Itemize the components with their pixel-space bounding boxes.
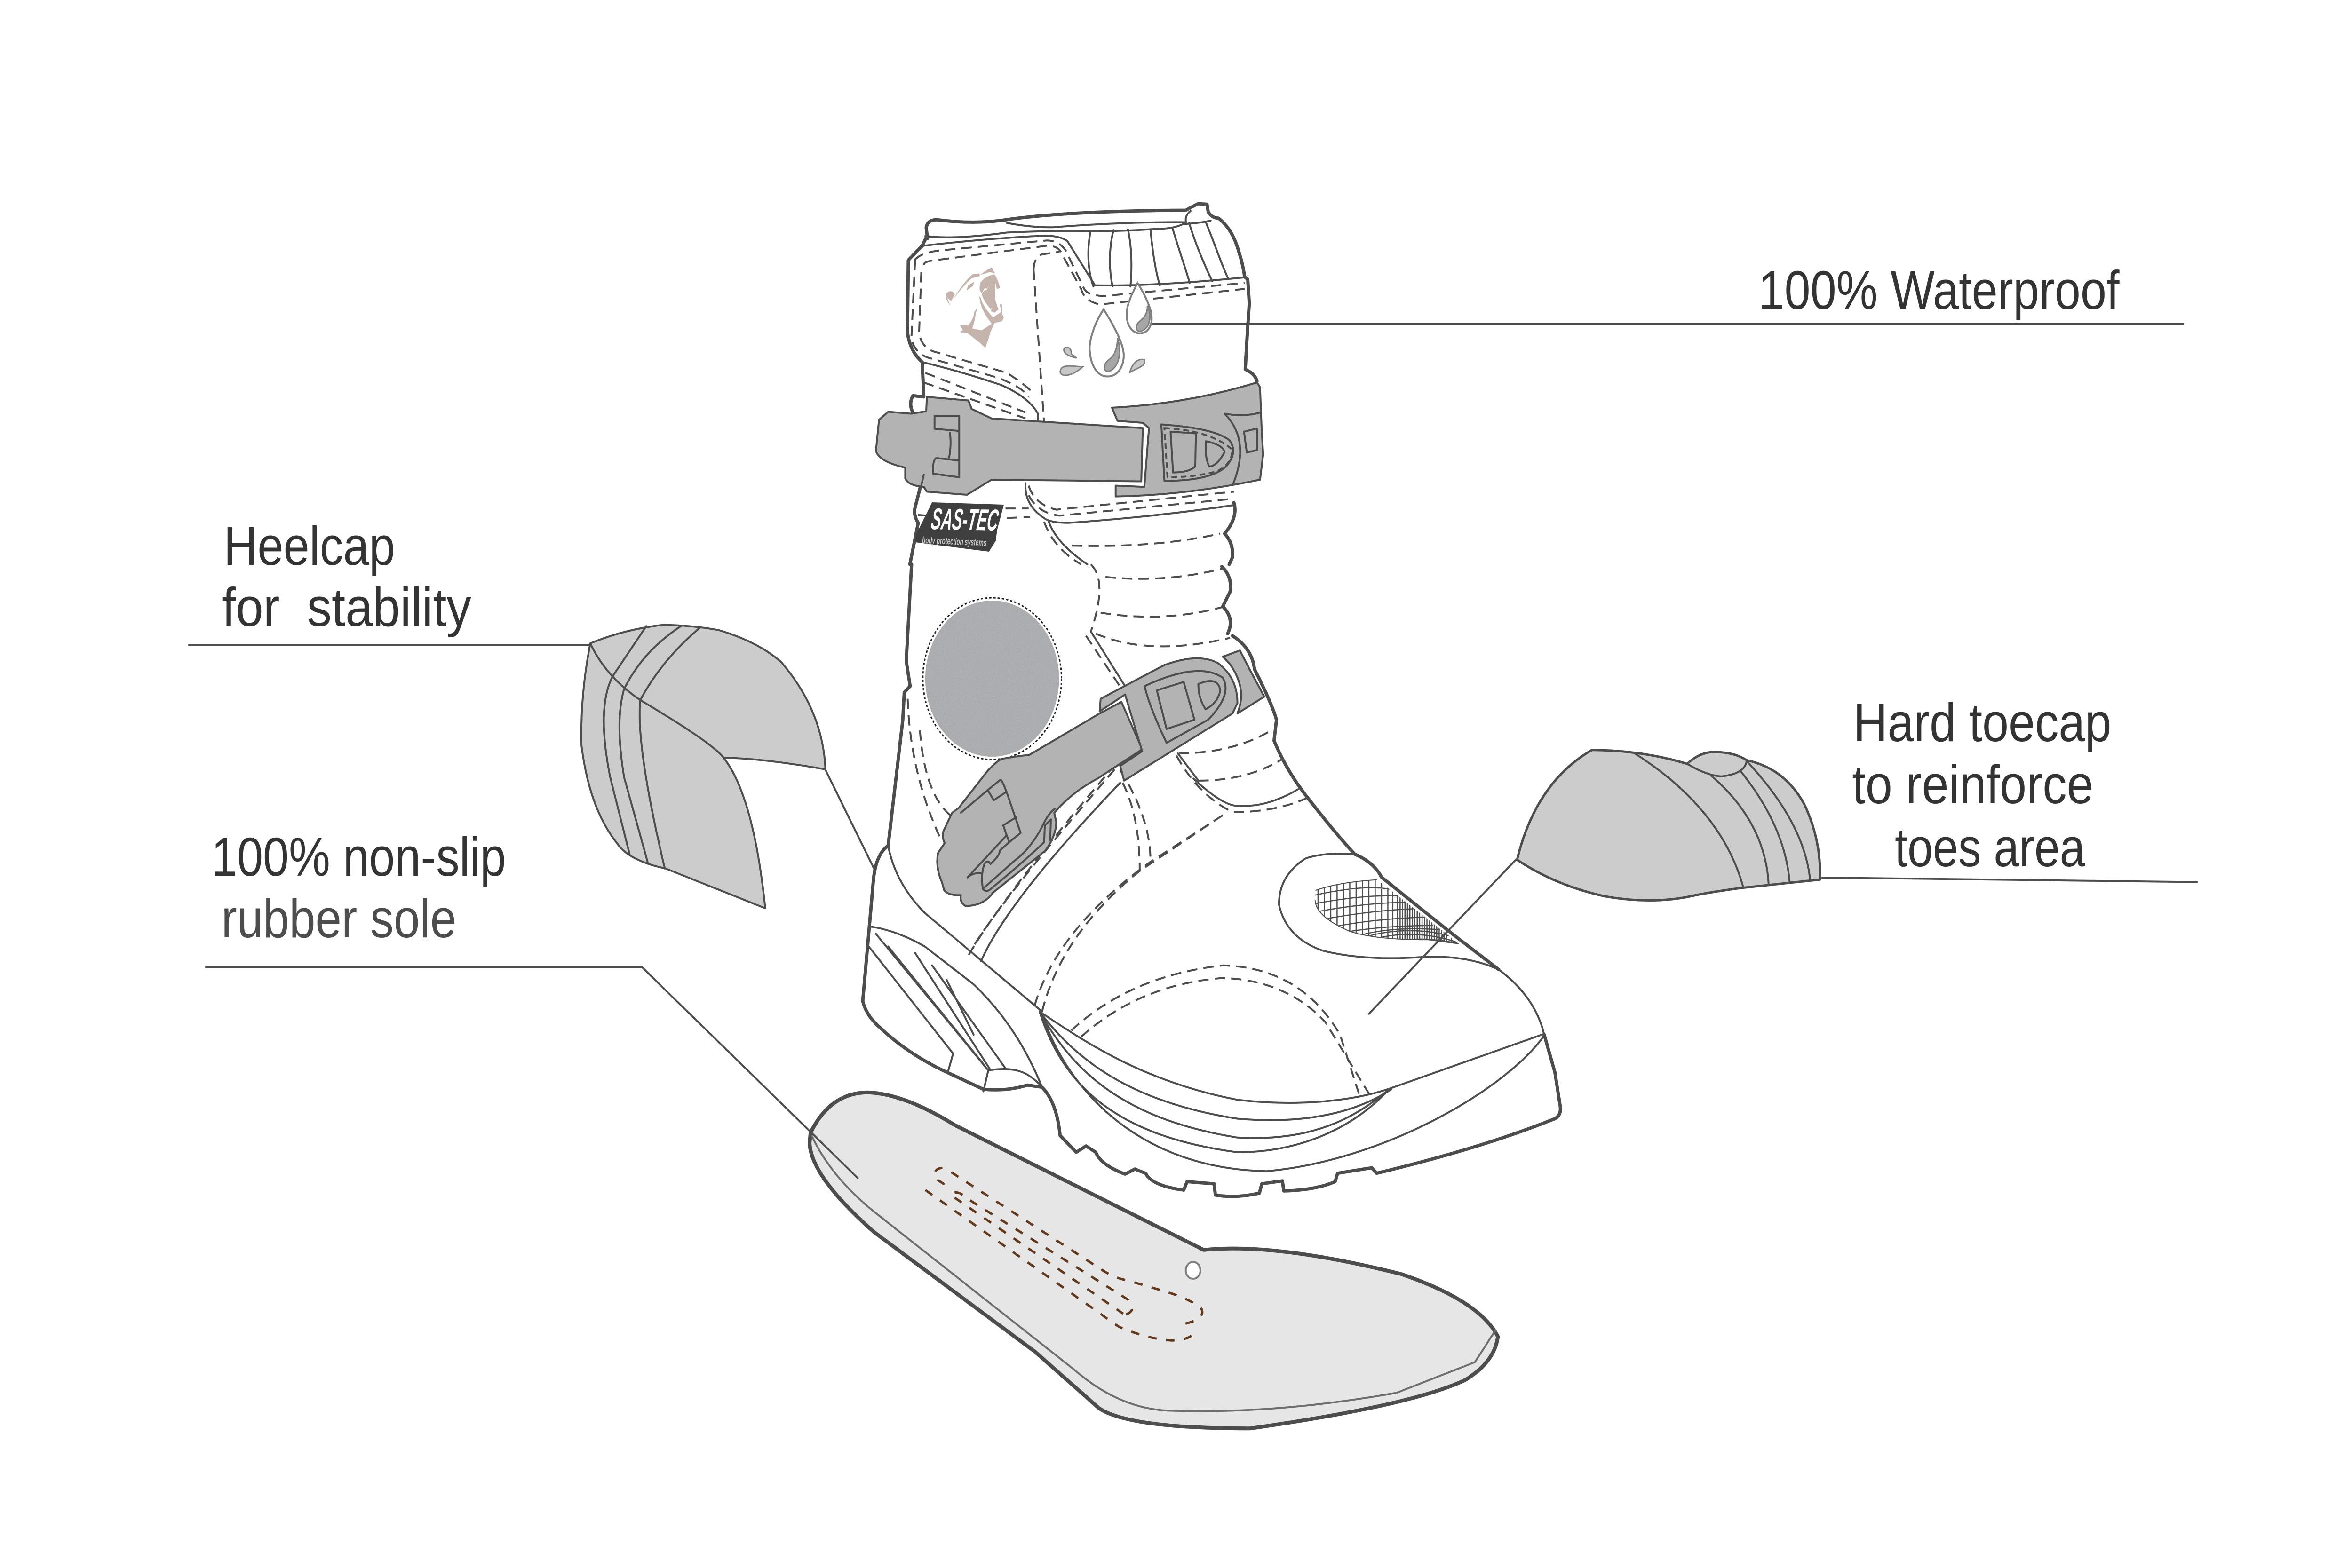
part: insole [810, 1093, 1498, 1428]
insole body [810, 1093, 1498, 1428]
upper strap tip details [921, 416, 959, 488]
upper strap band [876, 397, 1143, 495]
part: toecap [1517, 750, 1820, 901]
heel seam and welt [888, 846, 1544, 1171]
label: toecap: Hard toecap [1853, 692, 2111, 753]
toecap body [1517, 750, 1820, 901]
toecap knob and ridges [1633, 752, 1810, 887]
lower strap band [937, 702, 1142, 906]
label: rubber sole [211, 826, 506, 949]
vamp seams [981, 632, 1298, 961]
label: toecap: to reinforce [1852, 754, 2094, 815]
strap tip details [961, 780, 1055, 891]
heel wedge lines [867, 927, 1042, 1092]
boot outsole outline [863, 564, 1560, 1196]
lower buckle right piece [1223, 650, 1264, 713]
label: rubber sole: 100% non-slip [211, 826, 506, 887]
upper strap [876, 382, 1263, 497]
label: heelcap: for stability [222, 577, 471, 638]
lower shaft stitching [918, 486, 1234, 564]
cuff ribs [1089, 223, 1229, 286]
vamp stitching [908, 564, 1369, 1096]
insole hole [1186, 1262, 1200, 1279]
lower strap zone lines [1025, 483, 1235, 564]
icon: bear logo [946, 267, 1004, 348]
shaft left outline [907, 235, 928, 564]
toe mesh [1311, 875, 1462, 955]
buckle stitching [1164, 428, 1232, 477]
leader: waterproof [1152, 323, 2184, 325]
icon: water drops [1060, 283, 1152, 377]
insole inner rim [811, 1135, 1495, 1411]
panel stitching [912, 240, 1245, 423]
collar lines [925, 211, 1211, 238]
insole stitching [925, 1168, 1202, 1340]
label: waterproof: 100% Waterproof [1758, 260, 2120, 321]
illustration: boot lower and sole [863, 564, 1560, 1196]
tag title: SAS-TEC [929, 502, 1001, 537]
label: toecap: toes area [1895, 817, 2085, 878]
panel seam [908, 236, 1245, 422]
toe mesh swoosh [1279, 854, 1499, 970]
illustration: boot upper shaft [876, 204, 1263, 564]
SAS-TEC tag [915, 502, 1004, 552]
upper buckle [1112, 382, 1263, 497]
part: heelcap [581, 625, 826, 908]
label: heelcap: Heelcap [224, 515, 395, 577]
lower buckle [1100, 650, 1264, 781]
boot right outline [1222, 566, 1499, 970]
lower buckle body [1100, 658, 1238, 781]
leader: sole [205, 967, 858, 1179]
heelcap body [581, 625, 826, 908]
shaft right ribs [1224, 502, 1235, 564]
heelcap ridges [590, 626, 723, 869]
lower buckle details [1144, 671, 1225, 743]
leader: heelcap [188, 645, 874, 869]
cuff outline [926, 204, 1257, 381]
tag background [915, 502, 1004, 552]
leader: toecap [1368, 860, 2198, 1014]
upper buckle details [1161, 412, 1260, 484]
ankle disc [923, 598, 1062, 760]
label: toecap [1852, 692, 2111, 878]
tag subtitle: body protection systems [922, 535, 987, 548]
toe contour [1499, 970, 1544, 1035]
label: rubber sole: rubber sole [222, 888, 456, 949]
label: heelcap [222, 515, 471, 638]
strap silhouette [937, 702, 1142, 906]
